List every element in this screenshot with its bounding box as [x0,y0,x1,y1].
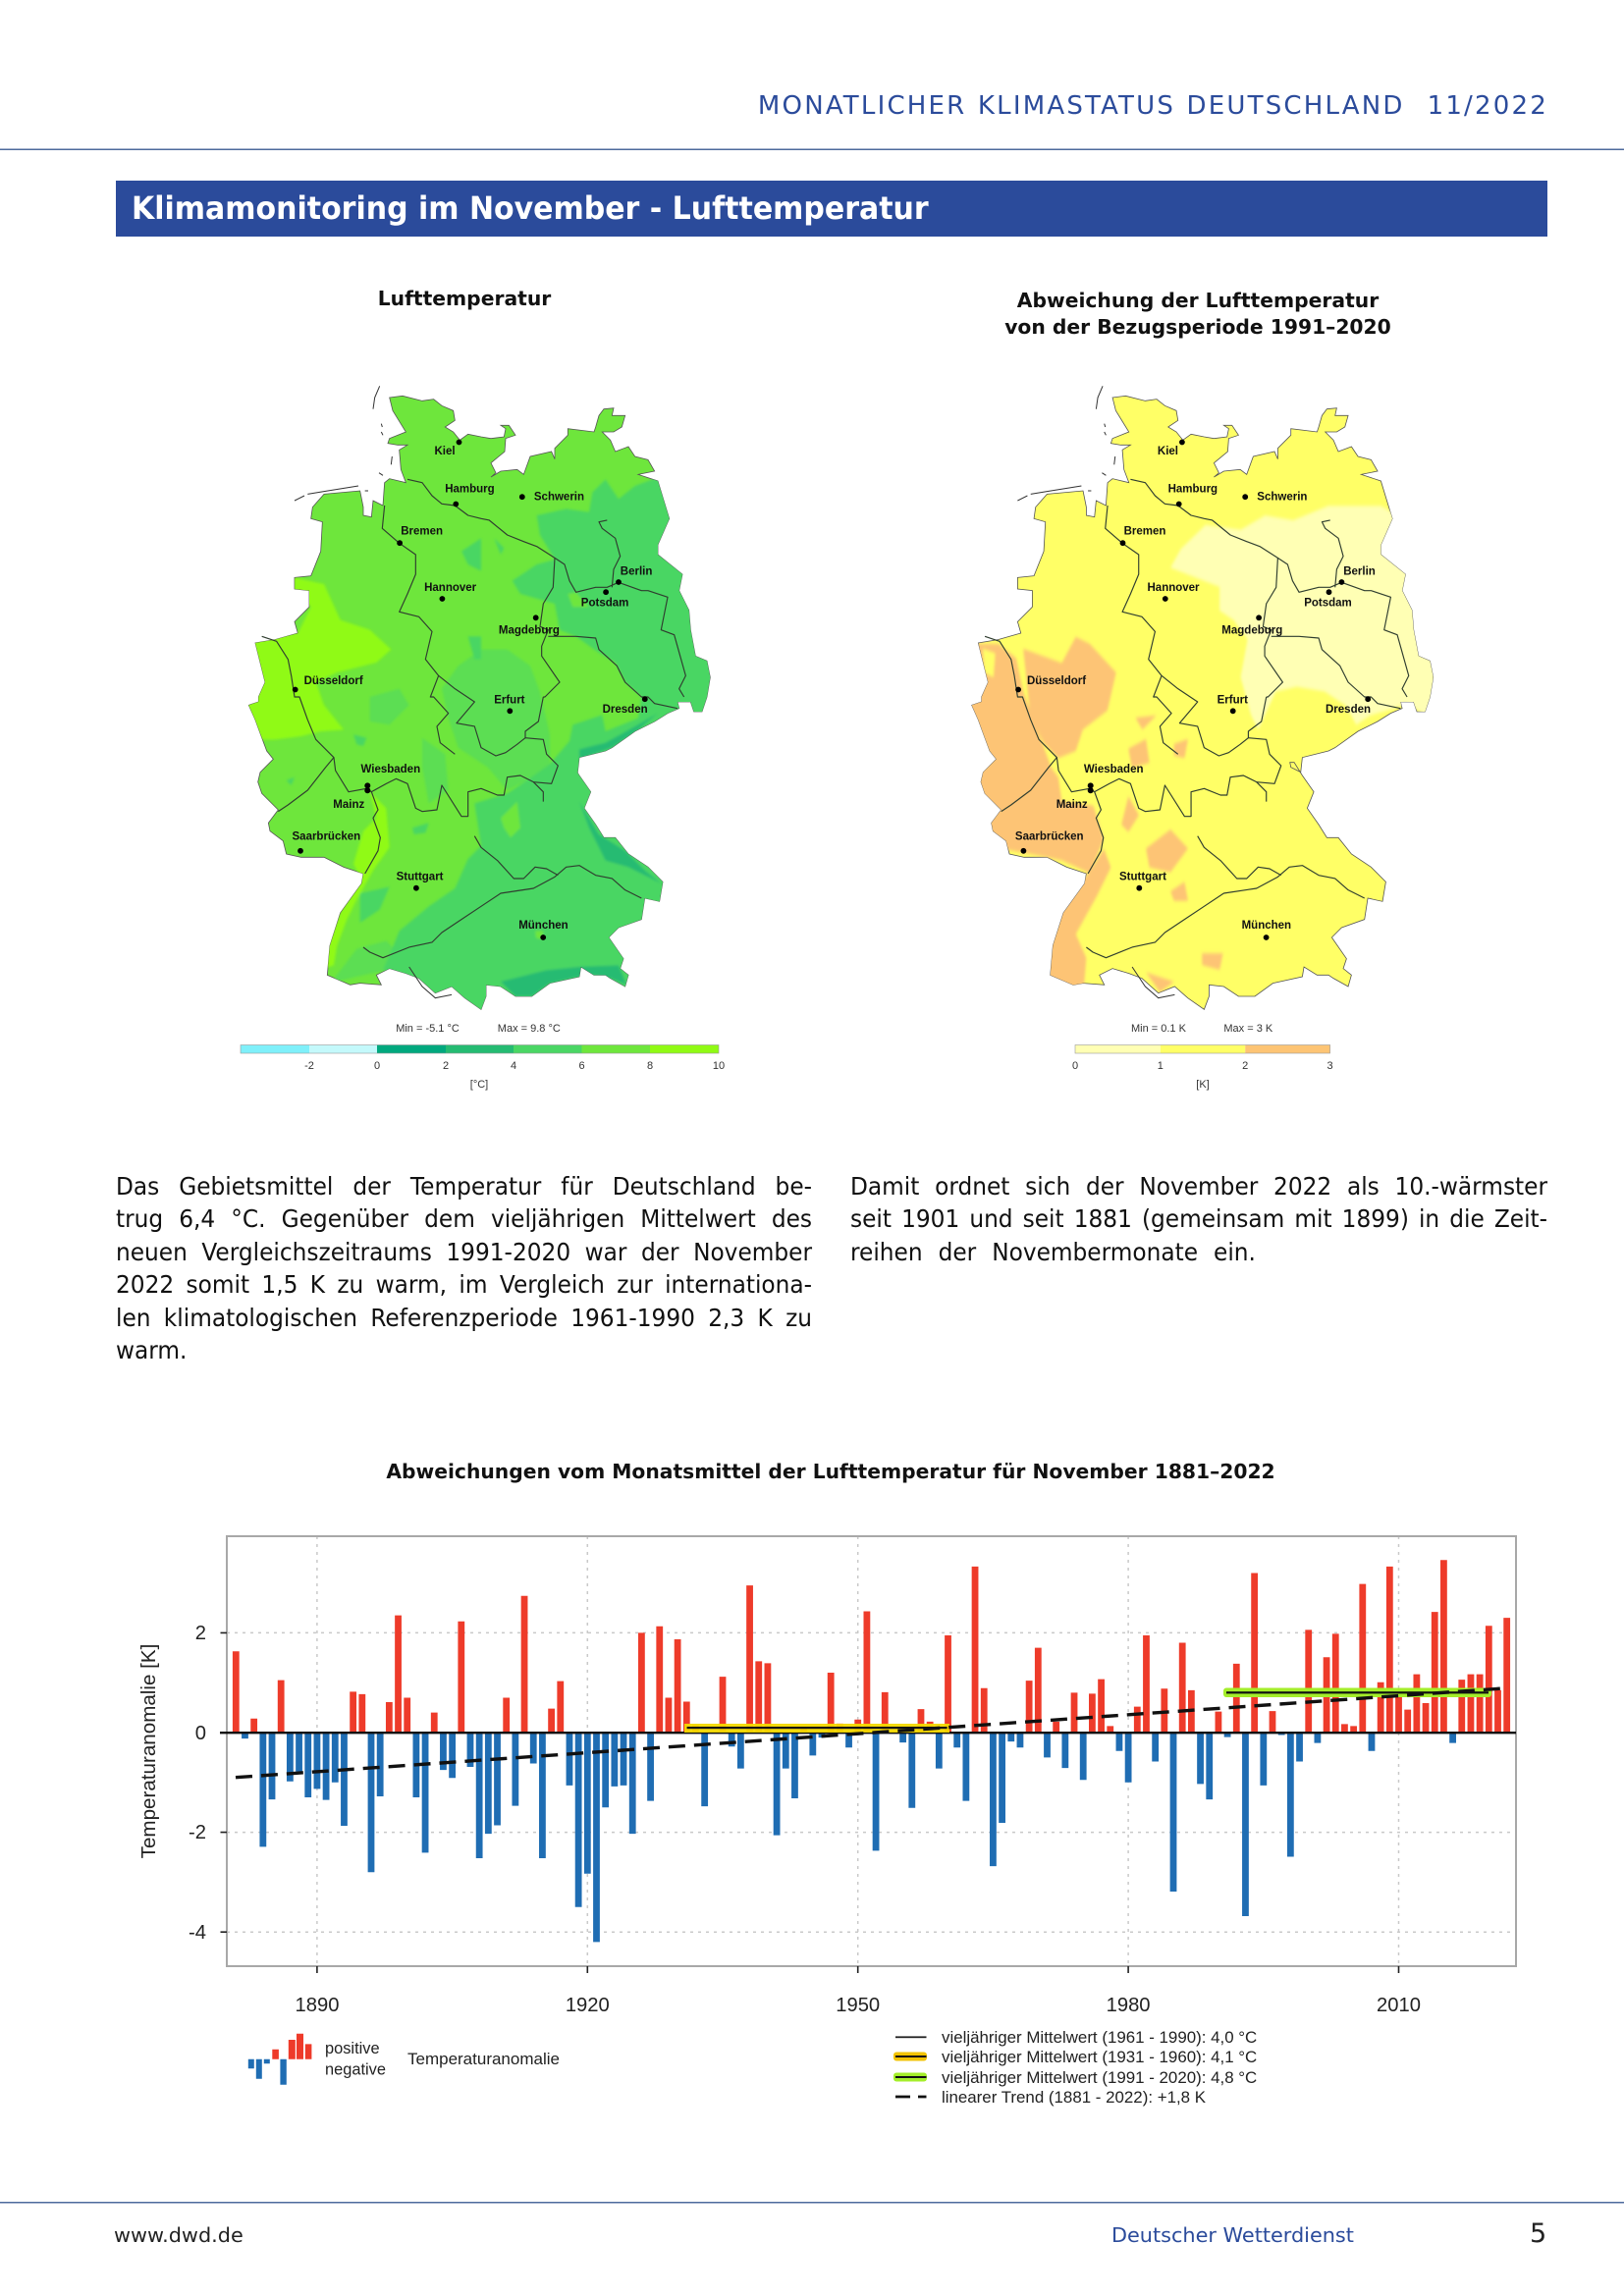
right map heading [1004,289,1391,338]
paragraph left [116,1172,813,1364]
city labels of temperature map: Kiel [434,446,456,457]
y axis title: Temperaturanomalie [K] [137,1644,160,1858]
city labels of temperature map: Hamburg [445,483,495,495]
paragraph right: Damit ordnet sich der November 2022 als 10.-wärmster [850,1172,1547,1201]
city labels of deviation map: Hannover [1148,582,1200,594]
x axis labels: 1950 [836,1995,880,2016]
map: air temperature [245,386,736,1033]
city labels of deviation map: Kiel [1158,446,1178,457]
zero line [220,1732,1516,1734]
footer page number: 5 [1530,2218,1546,2249]
mean 1991-2020 line [1223,1688,1491,1697]
city labels of deviation map: Magdeburg [1221,624,1282,636]
city labels of deviation map: Erfurt [1218,695,1248,707]
min max of temperature map [396,1023,561,1035]
paragraph left: 2022 somit 1,5 K zu warm, im Vergleich zur internationa- [116,1270,812,1299]
x axis labels: 2010 [1377,1995,1421,2016]
city labels of temperature map: Stuttgart [397,871,444,882]
paragraph left: len klimatologischen Referenzperiode 1961-1990 2,3 K zu [116,1304,812,1332]
legend: anomaly bars: negative [325,2061,386,2079]
city labels of deviation map: Berlin [1343,566,1376,578]
y axis labels [189,1623,206,1944]
min max of deviation map [1131,1023,1273,1035]
city labels of deviation map: Hamburg [1168,483,1218,495]
colour scale of deviation map [1072,1044,1333,1091]
right map heading: von der Bezugsperiode 1991–2020 [1004,314,1391,338]
state borders and rivers [262,479,685,958]
deviation zones [960,506,1444,1001]
y axis labels: 0 [195,1723,206,1744]
left map heading: Lufttemperatur [378,287,551,310]
city labels of temperature map: Hannover [424,582,477,594]
temperature zones [249,479,711,1009]
min max of deviation map: Max = 3 K [1223,1023,1273,1035]
colour scale of temperature map: -2 [304,1060,314,1072]
x axis labels: 1890 [296,1995,339,2016]
city labels of deviation map: Saarbrücken [1015,831,1084,843]
city labels of temperature map: Potsdam [581,598,628,610]
city labels of deviation map: Bremen [1124,526,1165,538]
footer organisation: Deutscher Wetterdienst [1111,2223,1354,2247]
x axis labels [296,1995,1421,2016]
state borders and rivers of deviation map [985,479,1409,958]
map: temperature deviation [960,386,1444,1009]
city labels of deviation map: Mainz [1056,799,1088,811]
paragraph right [850,1172,1547,1266]
islands and coast lines [295,386,452,998]
city labels of temperature map: Düsseldorf [304,675,363,687]
min max of deviation map: Min = 0.1 K [1131,1023,1187,1035]
colour scale of temperature map: 6 [578,1060,585,1072]
city labels of temperature map: Wiesbaden [361,764,420,775]
axis ticks [220,1632,1398,1973]
linear trend [236,1688,1506,1778]
grid lines [227,1536,1516,1966]
plot frame [227,1536,1516,1966]
legend: anomaly bars: Temperaturanomalie [407,2050,560,2068]
chart title: Abweichungen vom Monatsmittel der Lufttemperatur für November 1881–2022 [386,1460,1275,1483]
city labels of temperature map: Mainz [333,799,364,811]
city labels of temperature map: Saarbrücken [293,831,360,843]
colour scale of temperature map: 0 [374,1060,380,1072]
legend: reference lines: vieljähriger Mittelwert (1991 - 2020): 4,8 °C [942,2068,1257,2087]
paragraph left: Das Gebietsmittel der Temperatur für Deutschland be- [116,1172,812,1201]
city labels of deviation map: Dresden [1326,704,1371,716]
city labels of temperature map: Magdeburg [499,624,560,636]
section title bar: Klimamonitoring im November - Lufttemperatur [132,189,929,227]
header rule [0,149,1624,150]
positive bars [233,1560,1510,1733]
legend: reference lines: linearer Trend (1881 - 2022): +1,8 K [942,2088,1207,2107]
colour scale of deviation map: [K] [1196,1079,1210,1091]
colour scale of deviation map: 3 [1327,1060,1333,1072]
city labels of temperature map: München [518,920,568,932]
colour scale of temperature map: 8 [647,1060,653,1072]
city labels of temperature map: Bremen [401,526,443,538]
city labels of temperature map: Dresden [603,704,648,716]
paragraph left: neuen Vergleichszeitraums 1991-2020 war der November [116,1238,812,1266]
section title bar [116,181,1547,237]
icon: mini bars [248,2034,311,2085]
base fill of deviation map [972,396,1434,1009]
city labels of temperature map: Schwerin [534,492,584,504]
legend: anomaly bars: positive [325,2040,380,2057]
y axis labels: 2 [195,1623,206,1644]
colour scale of temperature map: [°C] [470,1079,488,1091]
footer website: www.dwd.de [114,2223,244,2247]
legend: reference lines: vieljähriger Mittelwert (1961 - 1990): 4,0 °C [942,2028,1257,2047]
city labels of deviation map: Düsseldorf [1027,675,1086,687]
city labels of deviation map: Schwerin [1257,492,1307,504]
city labels of deviation map: Potsdam [1304,598,1352,610]
y axis labels: -4 [189,1922,206,1944]
islands and coast lines of deviation map [1017,386,1174,998]
city labels of deviation map: Stuttgart [1119,871,1166,882]
colour scale of temperature map: 2 [443,1060,449,1072]
city labels of temperature map [293,440,652,940]
city labels of deviation map: München [1242,920,1291,932]
colour scale of temperature map [241,1044,725,1091]
mean 1931-1960 line [684,1724,949,1733]
legend: reference lines [893,2028,1257,2107]
right map heading: Abweichung der Lufttemperatur [1017,289,1379,312]
legend: anomaly bars [248,2034,560,2085]
paragraph right: seit 1901 und seit 1881 (gemeinsam mit 1899) in die Zeit- [850,1204,1547,1233]
colour scale of deviation map: 1 [1158,1060,1164,1072]
base fill of temperature map [248,396,710,1009]
colour scale of deviation map: 2 [1242,1060,1248,1072]
min max of temperature map: Min = -5.1 °C [396,1023,460,1035]
paragraph left: trug 6,4 °C. Gegenüber dem vieljährigen Mittelwert des [116,1204,812,1233]
negative bars [242,1733,1456,1942]
chart: anomalies 1881-2022 [137,1536,1516,2016]
x axis labels: 1980 [1107,1995,1151,2016]
colour scale of deviation map: 0 [1072,1060,1078,1072]
paragraph right: reihen der Novembermonate ein. [850,1238,1256,1266]
colour scale of temperature map: 10 [713,1060,725,1072]
paragraph left: warm. [116,1336,187,1364]
city labels of temperature map: Erfurt [494,695,525,707]
page header text: MONATLICHER KLIMASTATUS DEUTSCHLAND 11/2022 [758,91,1548,121]
y axis labels: -2 [189,1822,206,1843]
city labels of deviation map [1015,440,1376,940]
min max of temperature map: Max = 9.8 °C [498,1023,561,1035]
city labels of temperature map: Berlin [621,566,652,578]
colour scale of temperature map: 4 [511,1060,516,1072]
footer rule [0,2202,1624,2203]
legend: reference lines: vieljähriger Mittelwert (1931 - 1960): 4,1 °C [942,2048,1257,2066]
x axis labels: 1920 [566,1995,610,2016]
city labels of deviation map: Wiesbaden [1084,764,1144,775]
